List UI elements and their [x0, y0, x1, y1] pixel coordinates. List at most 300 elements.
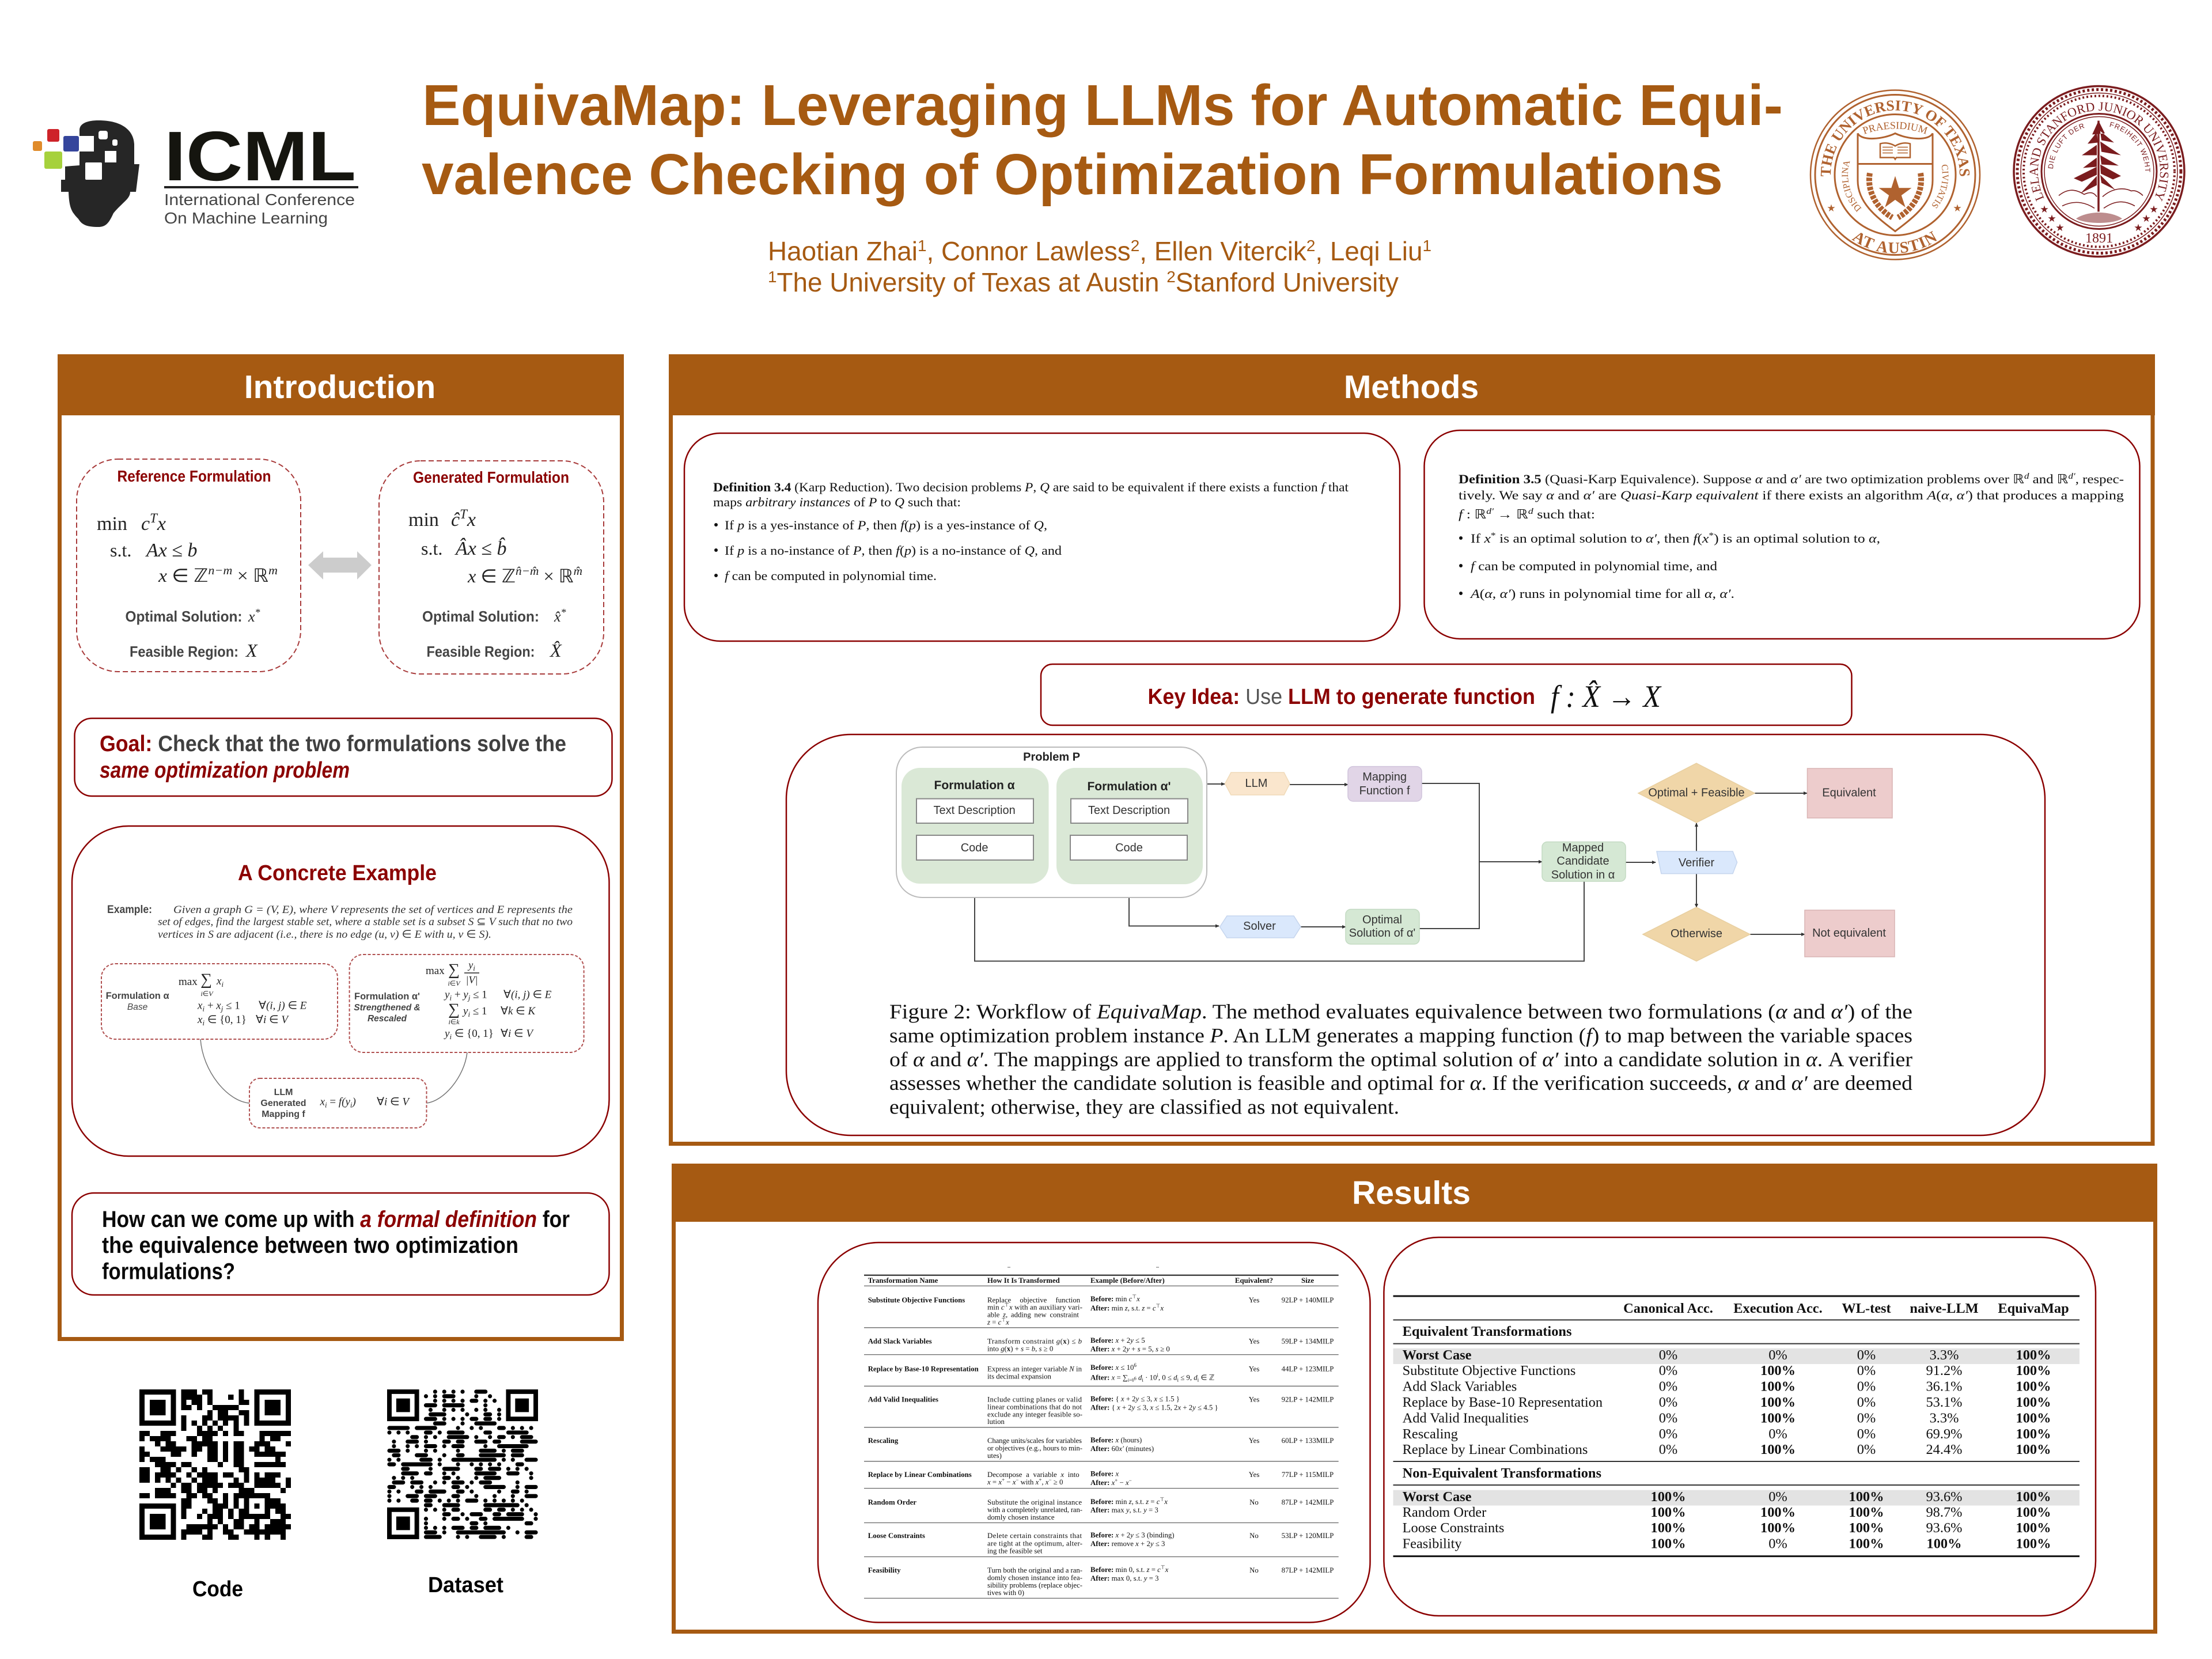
- row: substitute objective functions: Substitute Objective Functions: [868, 1296, 965, 1304]
- formulation alpha prime box: ∈ {0, 1}: [452, 1028, 494, 1040]
- row: add valid inequalities: Add Valid Inequalities: [868, 1396, 938, 1404]
- row: replace by linear combinations: Decompose a variable x into: [987, 1471, 1080, 1479]
- section: non-equivalent transformations: 100%: [1651, 1520, 1685, 1536]
- formulation alpha box: i: [202, 1018, 204, 1027]
- question callout: formulations?: [102, 1259, 235, 1285]
- section: equivalent transformations: 0%: [1659, 1426, 1677, 1442]
- table header row: Example (Before/After): [1090, 1277, 1165, 1285]
- row: random order: x: [1164, 1498, 1168, 1506]
- row: replace by linear combinations: −: [1016, 1477, 1018, 1483]
- row: replace by linear combinations: +: [1039, 1477, 1041, 1483]
- icon: University of Texas seal: AT AUSTIN: [1851, 230, 1937, 253]
- accuracy table header: [1623, 1301, 2069, 1316]
- section: non-equivalent transformations: 100%: [2016, 1520, 2051, 1536]
- section: non-equivalent transformations: 100%: [1849, 1489, 1884, 1505]
- optimal solution node: Optimal: [1362, 914, 1402, 926]
- row: add slack variables: 59LP + 134MILP: [1282, 1338, 1334, 1346]
- outcome: not equivalent: Not equivalent: [1812, 927, 1886, 940]
- section: equivalent transformations: 100%: [2016, 1379, 2051, 1394]
- row: random order: ⊤: [1160, 1497, 1164, 1502]
- section: equivalent transformations: 0%: [1857, 1426, 1876, 1442]
- section: equivalent transformations: 100%: [2016, 1395, 2051, 1410]
- row: substitute objective functions: Before: min c: [1090, 1295, 1132, 1303]
- accuracy table card: [1384, 1237, 2096, 1616]
- definition 3.4 card: [684, 433, 1400, 641]
- example problem statement: [107, 904, 573, 941]
- decision: optimal + feasible: [1638, 763, 1755, 823]
- row: loose constraints: Before: x + 2y ≤ 3 (binding): [1090, 1531, 1175, 1539]
- definition 3.5 card: *: [1709, 531, 1714, 540]
- row: add valid inequalities: [868, 1395, 1334, 1426]
- definition 3.4 card: maps arbitrary instances of P to Q such that:: [713, 495, 961, 509]
- row: replace by linear combinations: −: [1118, 1479, 1126, 1487]
- section: equivalent transformations: 100%: [1760, 1395, 1796, 1410]
- formulation alpha prime box: max: [426, 965, 445, 977]
- definition 3.5 card: If x: [1471, 531, 1490, 546]
- formulation alpha box: ∑: [200, 971, 212, 988]
- definition 3.5 card: d′: [1486, 507, 1494, 516]
- table header row: [868, 1277, 1314, 1285]
- formulation alpha box: i: [221, 980, 224, 988]
- formulation alpha prime box: ≤ 1: [470, 988, 487, 1001]
- row: substitute objective functions: 92LP + 140MILP: [1282, 1296, 1334, 1304]
- reference formulation box: T: [150, 511, 158, 525]
- row: rescaling: Before: x (hours): [1090, 1436, 1142, 1444]
- generated formulation box: × ℝ: [539, 566, 574, 586]
- generated formulation box: x ∈ ℤ: [468, 566, 515, 586]
- icon: University of Texas seal: [1810, 89, 1980, 260]
- row: feasibility: No: [1249, 1566, 1259, 1574]
- logo head silhouette: [61, 120, 139, 227]
- row: add slack variables: Transform constraint g(x) ≤ b: [987, 1338, 1082, 1346]
- heading: Results: Results: [1352, 1175, 1471, 1211]
- LLM generated mapping box: ): [352, 1096, 356, 1108]
- outcome: equivalent: Equivalent: [1822, 787, 1876, 800]
- formulation alpha box: x: [198, 1014, 202, 1026]
- formulation alpha box: +: [204, 1000, 216, 1012]
- LLM generated mapping box: i: [325, 1100, 327, 1109]
- row: substitute objective functions: z = c: [987, 1319, 1001, 1327]
- generated formulation box: T: [460, 507, 468, 521]
- section: non-equivalent transformations: [1403, 1465, 2051, 1552]
- generated formulation box: [379, 461, 604, 674]
- LLM generated mapping box: =: [327, 1096, 339, 1108]
- definition 3.5 card: [1424, 430, 2139, 639]
- row: substitute objective functions: Yes: [1249, 1296, 1259, 1304]
- section: equivalent transformations: 0%: [1659, 1442, 1677, 1457]
- generated formulation box: min: [408, 509, 439, 531]
- icon: code QR: [139, 1389, 291, 1540]
- generated formulation box: m̂: [574, 564, 582, 578]
- definition 3.5 card: f : ℝ: [1459, 507, 1483, 521]
- transformations table card: [818, 1243, 1370, 1622]
- row: replace by linear combinations: ≥ 0: [1052, 1478, 1063, 1486]
- title: [422, 73, 1783, 207]
- section: non-equivalent transformations: 100%: [1651, 1505, 1685, 1520]
- formulation alpha box: [101, 964, 338, 1039]
- section: non-equivalent transformations: 0%: [1768, 1489, 1787, 1505]
- authors and affiliations: 1: [1422, 237, 1431, 255]
- section: equivalent transformations: 100%: [1760, 1363, 1796, 1378]
- LLM generated mapping box: LLM: [274, 1088, 293, 1097]
- formulation alpha box: i∈V: [200, 990, 214, 998]
- row: substitute objective functions: x: [1005, 1319, 1009, 1327]
- section: equivalent transformations: 0%: [1857, 1411, 1876, 1426]
- worst case highlight bands: [1393, 1349, 2080, 1506]
- reference formulation box: [77, 459, 301, 672]
- section: non-equivalent transformations: 93.6%: [1926, 1489, 1963, 1505]
- row: replace by base-10 representation: i: [1142, 1377, 1143, 1382]
- row: substitute objective functions: able z, adding new constraint: [987, 1311, 1079, 1319]
- definition 3.5 card: and ℝ: [2029, 472, 2069, 486]
- authors and affiliations: , Connor Lawless: [926, 236, 1131, 266]
- question callout: the equivalence between two optimization: [102, 1233, 518, 1258]
- section: non-equivalent transformations: 98.7%: [1926, 1505, 1963, 1520]
- section: equivalent transformations: 100%: [2016, 1347, 2051, 1363]
- reference formulation box: x ∈ ℤ: [158, 565, 206, 586]
- table header row: How It Is Transformed: [987, 1277, 1060, 1285]
- title: EquivaMap: Leveraging LLMs for Automatic Equi-: [422, 73, 1783, 138]
- definition 3.4 card: If p is a yes-instance of P, then f(p) is a yes-instance of Q,: [725, 518, 1047, 532]
- definition 3.5 card: d′: [2069, 472, 2076, 481]
- row: replace by linear combinations: [868, 1469, 1334, 1487]
- row: feasibility: tives with 0): [987, 1589, 1024, 1597]
- formulation alpha box: Base: [127, 1002, 148, 1012]
- row: add valid inequalities: Yes: [1249, 1396, 1259, 1404]
- formulation alpha prime box: y: [463, 1005, 468, 1017]
- section: non-equivalent transformations: 0%: [1768, 1536, 1787, 1552]
- LLM generated mapping box: i: [350, 1100, 353, 1109]
- row: replace by base-10 representation: , 0 ≤: [1158, 1373, 1173, 1381]
- figure caption: same optimization problem instance P. An LLM generates a mapping function ( f) to map between the variable spaces: [889, 1024, 1912, 1047]
- row: replace by linear combinations: −: [1048, 1477, 1052, 1483]
- row: random order: Before: min z, s.t. z = c: [1090, 1498, 1160, 1506]
- row: replace by base-10 representation: · 10: [1143, 1373, 1157, 1381]
- row: replace by base-10 representation: Before: x ≤ 10: [1090, 1363, 1134, 1372]
- formulation alpha box: x: [216, 1000, 221, 1012]
- example problem statement: Given a graph G = (V, E), where V represents the set of vertices and E represents the: [173, 904, 573, 916]
- LLM node: [1225, 772, 1290, 795]
- accuracy table header: WL-test: [1842, 1301, 1892, 1316]
- problem P container: [896, 747, 1207, 897]
- solver node: Solver: [1243, 920, 1276, 933]
- title: valence Checking of Optimization Formulations: [422, 142, 1723, 207]
- logo subtitle: [164, 191, 355, 227]
- section: equivalent transformations: 0%: [1857, 1442, 1876, 1457]
- formulation alpha prime box: +: [452, 988, 463, 1001]
- formulation alpha box: ∈ {0, 1}: [204, 1014, 247, 1026]
- section: equivalent transformations: 100%: [2016, 1411, 2051, 1426]
- formulation alpha prime box: j: [467, 993, 471, 1002]
- section: non-equivalent transformations: 100%: [1651, 1489, 1685, 1505]
- row: random order: 87LP + 142MILP: [1282, 1498, 1334, 1506]
- formulation alpha prime box: ∀k ∈ K: [501, 1005, 536, 1017]
- question callout: How can we come up with a formal definition for: [102, 1207, 570, 1232]
- row: replace by base-10 representation: d: [1173, 1373, 1177, 1381]
- section: non-equivalent transformations: Loose Constraints: [1403, 1520, 1504, 1536]
- row: substitute objective functions: x: [1160, 1304, 1164, 1312]
- row: add valid inequalities: After: { x + 2y ≤ 3, x ≤ 1.5, 2x + 2y ≤ 4.5 }: [1090, 1403, 1218, 1411]
- section: non-equivalent transformations: Worst Case: [1403, 1489, 1472, 1505]
- generated formulation box: s.t.: [421, 538, 442, 559]
- section: equivalent transformations: 100%: [1760, 1442, 1796, 1457]
- section: equivalent transformations: Worst Case: [1403, 1347, 1472, 1363]
- row: replace by linear combinations: with: [1018, 1478, 1036, 1486]
- panel: Methods: [669, 354, 2155, 1144]
- row: random order: with a completely unrelated, ran-: [987, 1506, 1082, 1514]
- row: rescaling: Rescaling: [868, 1437, 899, 1445]
- table rules: [1393, 1296, 2080, 1556]
- row: rescaling: Yes: [1249, 1437, 1259, 1445]
- figure caption: of α and α′. The mappings are applied to transform the optimal solution of α′ into a candidate solution in α. A verifier: [889, 1048, 1912, 1071]
- row: replace by base-10 representation: i: [1198, 1377, 1199, 1382]
- row: add slack variables: After: x + 2y + s = 5, s ≥ 0: [1090, 1345, 1170, 1353]
- formulation alpha box: ≤ 1: [223, 1000, 240, 1012]
- definition 3.4 card: Definition 3.4 (Karp Reduction). Two decision problems P, Q are said to be equivalent if there exists a function f that: [713, 480, 1349, 494]
- section: non-equivalent transformations: 100%: [1760, 1520, 1796, 1536]
- row: loose constraints: 53LP + 120MILP: [1282, 1532, 1334, 1540]
- mapped candidate solution node: [1542, 842, 1626, 881]
- section: equivalent transformations: 0%: [1659, 1395, 1677, 1410]
- row: replace by linear combinations: ,: [1041, 1478, 1046, 1486]
- row: replace by base-10 representation: i=0: [1128, 1377, 1134, 1382]
- generated formulation box: ĉ: [451, 509, 460, 531]
- mapped candidate solution node: Solution in α: [1551, 869, 1615, 881]
- icon: Stanford seal: FREIHEIT WEHT: [2109, 122, 2150, 172]
- reference formulation box: n−m: [208, 563, 232, 577]
- goal callout: same optimization problem: [100, 758, 350, 783]
- formulation alpha: Text Description: [933, 804, 1016, 817]
- section: equivalent transformations: 0%: [1857, 1347, 1876, 1363]
- row: substitute objective functions: [868, 1294, 1334, 1327]
- row: substitute objective functions: ⊤: [1156, 1303, 1161, 1309]
- mapping function node: [1348, 767, 1422, 801]
- row: random order: After: max y, s.t. y = 3: [1090, 1506, 1158, 1514]
- label: Code: Code: [192, 1577, 243, 1601]
- section: equivalent transformations: 0%: [1857, 1363, 1876, 1378]
- formulation alpha prime box: ∑: [448, 961, 460, 979]
- row: feasibility: x: [1165, 1566, 1169, 1574]
- row: add slack variables: Before: x + 2y ≤ 5: [1090, 1336, 1145, 1344]
- icon: University of Texas seal: THE UNIVERSITY OF TEXAS: [1820, 100, 1970, 176]
- formulation alpha prime box: Rescaled: [368, 1014, 407, 1024]
- row: rescaling: 60LP + 133MILP: [1282, 1437, 1334, 1445]
- icon: Stanford seal: 1891: [2085, 231, 2113, 246]
- row: add valid inequalities: 92LP + 142MILP: [1282, 1396, 1334, 1404]
- workflow connector lines: [975, 783, 1807, 961]
- formulation alpha prime box: i∈V: [448, 979, 461, 987]
- formulation alpha prime: [1056, 768, 1203, 884]
- goal callout: Goal: Check that the two formulations solve the: [100, 732, 566, 756]
- section: equivalent transformations: 36.1%: [1926, 1379, 1963, 1394]
- row: rescaling: or objectives (e.g., hours to min-: [987, 1444, 1082, 1452]
- row: add slack variables: Yes: [1249, 1338, 1259, 1346]
- row: add valid inequalities: lution: [987, 1418, 1005, 1426]
- generated formulation box: n̂−m̂: [516, 564, 539, 578]
- definition 3.5 card: α′, then f(x: [1646, 531, 1708, 546]
- reference formulation box: s.t.: [110, 540, 131, 560]
- section: non-equivalent transformations: 100%: [1760, 1505, 1796, 1520]
- workflow figure card: [786, 734, 2045, 1135]
- row: loose constraints: [868, 1531, 1334, 1555]
- section: equivalent transformations: 0%: [1659, 1379, 1677, 1394]
- row: replace by base-10 representation: [868, 1362, 1334, 1382]
- authors and affiliations: The University of Texas at Austin: [777, 267, 1166, 297]
- row: replace by base-10 representation: ≤ 9,: [1179, 1373, 1194, 1381]
- formulation alpha prime box: y: [463, 988, 468, 1001]
- connector curves: [200, 1039, 467, 1103]
- row: random order: Random Order: [868, 1498, 916, 1506]
- formulation alpha: [902, 768, 1048, 884]
- definition 3.5 card: → ℝ: [1494, 507, 1528, 521]
- formulation alpha prime box: Strengthened &: [354, 1003, 421, 1013]
- formulation alpha prime box: i: [449, 1032, 452, 1041]
- concrete example box: [72, 826, 609, 1156]
- row: loose constraints: After: remove x + 2y ≤ 3: [1090, 1540, 1165, 1548]
- formulation alpha prime box: i∈k: [448, 1018, 460, 1026]
- heading: Methods: Methods: [1344, 369, 1479, 406]
- section: equivalent transformations: Replace by Linear Combinations: [1403, 1442, 1588, 1457]
- generated formulation box: Âx ≤ b̂: [454, 537, 507, 559]
- row: random order: Substitute the original instance: [987, 1498, 1082, 1506]
- row: replace by base-10 representation: After: x = ∑: [1090, 1373, 1128, 1381]
- row: rescaling: After: 60x′ (minutes): [1090, 1445, 1154, 1453]
- icon: Stanford seal: DIE LUFT DER: [2048, 123, 2085, 169]
- section: equivalent transformations: 3.3%: [1930, 1411, 1959, 1426]
- decision: otherwise: [1643, 907, 1750, 961]
- formulation alpha prime box: ∀(i, j) ∈ E: [503, 988, 552, 1001]
- heading: Introduction: Introduction: [244, 369, 435, 406]
- formulation alpha prime box: i: [468, 1010, 470, 1018]
- row: random order: [868, 1497, 1334, 1521]
- mapped candidate solution node: Candidate: [1556, 855, 1609, 868]
- reference formulation box: *: [255, 607, 260, 618]
- bidirectional arrow: [308, 551, 372, 579]
- formulation alpha box: max: [179, 976, 198, 988]
- row: rescaling: utes): [987, 1452, 1002, 1460]
- panel: Results: [672, 1164, 2157, 1631]
- section: equivalent transformations: [1403, 1324, 2051, 1457]
- logo colour squares: [33, 129, 118, 180]
- section: equivalent transformations: 0%: [1857, 1395, 1876, 1410]
- row: feasibility: 87LP + 142MILP: [1282, 1566, 1334, 1574]
- row: add slack variables: Add Slack Variables: [868, 1338, 932, 1346]
- table header row: Transformation Name: [868, 1277, 938, 1285]
- logo subtitle: On Machine Learning: [164, 209, 328, 227]
- verifier node: Verifier: [1679, 857, 1714, 869]
- formulation alpha prime box: |V|: [466, 974, 478, 986]
- verifier node: [1657, 851, 1737, 874]
- formulation alpha box: ∀i ∈ V: [256, 1014, 289, 1026]
- row: feasibility: After: max 0, s.t. y = 3: [1090, 1574, 1158, 1582]
- question callout: [72, 1193, 609, 1295]
- formulation alpha prime box: ∀i ∈ V: [501, 1028, 534, 1040]
- section: equivalent transformations: 0%: [1659, 1363, 1677, 1378]
- section: non-equivalent transformations: 100%: [1651, 1536, 1685, 1552]
- reference formulation box: Ax ≤ b: [145, 540, 198, 561]
- row: add valid inequalities: exclude any integer feasible so-: [987, 1411, 1082, 1419]
- definition 3.5 card: d: [1528, 507, 1533, 516]
- generated formulation box: x̂: [554, 608, 561, 625]
- icon: University of Texas seal: PRAESIDIUM: [1862, 122, 1928, 134]
- generated formulation box: x: [467, 509, 476, 531]
- formulation alpha box: x: [198, 1000, 202, 1012]
- definition 3.5 card: , respec-: [2075, 472, 2124, 486]
- row: add slack variables: [868, 1336, 1334, 1353]
- row: loose constraints: ing the feasible set: [987, 1547, 1043, 1555]
- formulation alpha box: j: [220, 1005, 224, 1013]
- outcome: not equivalent: [1805, 910, 1895, 957]
- row: replace by linear combinations: x: [1012, 1478, 1016, 1486]
- formulation alpha box: Formulation α: [106, 991, 169, 1001]
- section: non-equivalent transformations: Feasibility: [1403, 1536, 1462, 1552]
- row: replace by linear combinations: 77LP + 115MILP: [1282, 1471, 1334, 1479]
- section: equivalent transformations: Substitute Objective Functions: [1403, 1363, 1575, 1378]
- LLM generated mapping box: Mapping f: [262, 1109, 305, 1119]
- reference formulation box: c: [141, 513, 150, 535]
- section: non-equivalent transformations: Random Order: [1403, 1505, 1486, 1520]
- row: feasibility: [868, 1565, 1334, 1597]
- formulation alpha: Formulation α: [934, 779, 1015, 792]
- row: substitute objective functions: Replace objective function: [987, 1296, 1081, 1304]
- authors and affiliations: 2: [1166, 268, 1176, 286]
- section: equivalent transformations: 100%: [1760, 1379, 1796, 1394]
- code QR finder patterns: [139, 1389, 291, 1540]
- optimal solution node: [1346, 909, 1419, 944]
- table rules: [864, 1274, 1339, 1276]
- row: feasibility: Before: min 0, s.t. z = c: [1090, 1566, 1161, 1574]
- row: substitute objective functions: ⊤: [1001, 1317, 1006, 1323]
- reference formulation box: m: [268, 563, 278, 577]
- definition 3.4 card: f can be computed in polynomial time.: [725, 569, 937, 583]
- formulation alpha prime: Text Description: [1088, 804, 1170, 817]
- example problem statement: Example:: [107, 904, 152, 916]
- section: non-equivalent transformations: 100%: [1927, 1536, 1961, 1552]
- definition 3.5 card: A(α, α′) runs in polynomial time for all α, α′.: [1469, 586, 1734, 601]
- key idea callout: Key Idea: Use LLM to generate function: [1147, 685, 1535, 709]
- mapped candidate solution node: Mapped: [1562, 842, 1604, 854]
- accuracy table header: Execution Acc.: [1733, 1301, 1823, 1316]
- section: equivalent transformations: Add Valid Inequalities: [1403, 1411, 1529, 1426]
- accuracy table header: naive-LLM: [1910, 1301, 1979, 1316]
- section: equivalent transformations: Rescaling: [1403, 1426, 1458, 1442]
- formulation alpha prime box: y: [445, 988, 449, 1001]
- section: equivalent transformations: Replace by Base-10 Representation: [1403, 1395, 1603, 1410]
- section: equivalent transformations: 91.2%: [1926, 1363, 1963, 1378]
- row: add valid inequalities: Include cutting planes or valid: [987, 1396, 1082, 1404]
- section: non-equivalent transformations: 100%: [1849, 1505, 1884, 1520]
- formulation alpha prime box: [350, 955, 584, 1052]
- figure caption: [889, 1000, 1912, 1119]
- mapping function node: Function f: [1359, 785, 1410, 797]
- icon: ICML logo: [33, 117, 358, 227]
- row: feasibility: Turn both the original and a ran-: [987, 1566, 1082, 1574]
- row: replace by base-10 representation: Yes: [1249, 1365, 1259, 1373]
- example problem statement: vertices in S are adjacent (i.e., there is no edge (u, v) ∈ E with u, v ∈ S).: [158, 929, 491, 941]
- row: replace by base-10 representation: 44LP + 123MILP: [1282, 1365, 1334, 1373]
- formulation alpha prime box: y: [445, 1028, 449, 1040]
- definition 3.5 card: α,: [1869, 531, 1880, 546]
- decision: otherwise: Otherwise: [1671, 927, 1722, 940]
- reference formulation box: X: [245, 640, 258, 661]
- row: replace by base-10 representation: Express an integer variable N in: [987, 1365, 1082, 1373]
- section: non-equivalent transformations: 100%: [2016, 1505, 2051, 1520]
- authors and affiliations: , Leqi Liu: [1315, 236, 1422, 266]
- row: replace by linear combinations: After: x: [1090, 1479, 1115, 1487]
- formulation alpha prime box: y: [468, 959, 473, 971]
- row: feasibility: Feasibility: [868, 1566, 901, 1574]
- accuracy table header: EquivaMap: [1998, 1301, 2069, 1316]
